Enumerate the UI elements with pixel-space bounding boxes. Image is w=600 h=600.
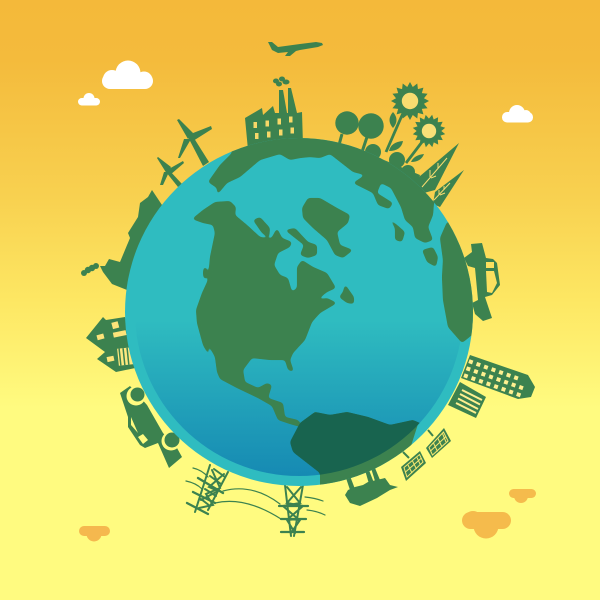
building stripes — [456, 390, 482, 413]
factory — [245, 76, 303, 150]
house door — [117, 347, 134, 366]
tractor — [345, 468, 398, 506]
pointed tree: large — [413, 143, 459, 194]
ship — [81, 190, 162, 290]
sunflower: lower — [406, 112, 448, 163]
pickup windows — [486, 262, 497, 293]
factory smoke — [273, 76, 290, 86]
pointed tree: small — [433, 170, 464, 207]
ship smoke — [81, 263, 99, 276]
shrubs and ground bumps — [360, 144, 420, 190]
cloud: small white left — [78, 93, 100, 106]
round trees — [335, 111, 384, 152]
building: short — [448, 382, 486, 418]
cloud: large white — [102, 60, 153, 89]
power wires — [186, 468, 281, 519]
cloud: orange bottom left — [79, 526, 110, 542]
power tower: right — [279, 485, 325, 536]
solar panel: upper — [426, 428, 451, 458]
wind turbine: small — [157, 157, 184, 187]
power tower: left — [186, 465, 281, 519]
plane — [268, 42, 323, 56]
solar panel: lower — [401, 451, 426, 481]
cloud: orange bottom right — [509, 489, 536, 503]
house — [86, 317, 140, 372]
car: left pickup — [120, 386, 182, 468]
land: north america and arctic islands — [192, 198, 354, 428]
car windows — [131, 417, 148, 444]
land: south america — [290, 412, 420, 475]
globe — [125, 138, 473, 486]
building: tall — [461, 355, 535, 399]
wind turbine: large — [177, 119, 212, 166]
cloud: small white right — [502, 105, 533, 122]
pickup: right side — [464, 243, 500, 321]
building windows — [463, 359, 526, 397]
factory windows — [254, 116, 294, 139]
land: south america rim — [300, 412, 418, 485]
land: top arc and east coast — [209, 138, 473, 342]
house windows — [96, 321, 127, 362]
cloud: orange bottom centre — [462, 511, 511, 538]
power wires right — [305, 497, 325, 515]
sunflower: upper — [386, 82, 429, 152]
car wheels — [130, 388, 180, 448]
car wheel arches — [126, 386, 180, 450]
